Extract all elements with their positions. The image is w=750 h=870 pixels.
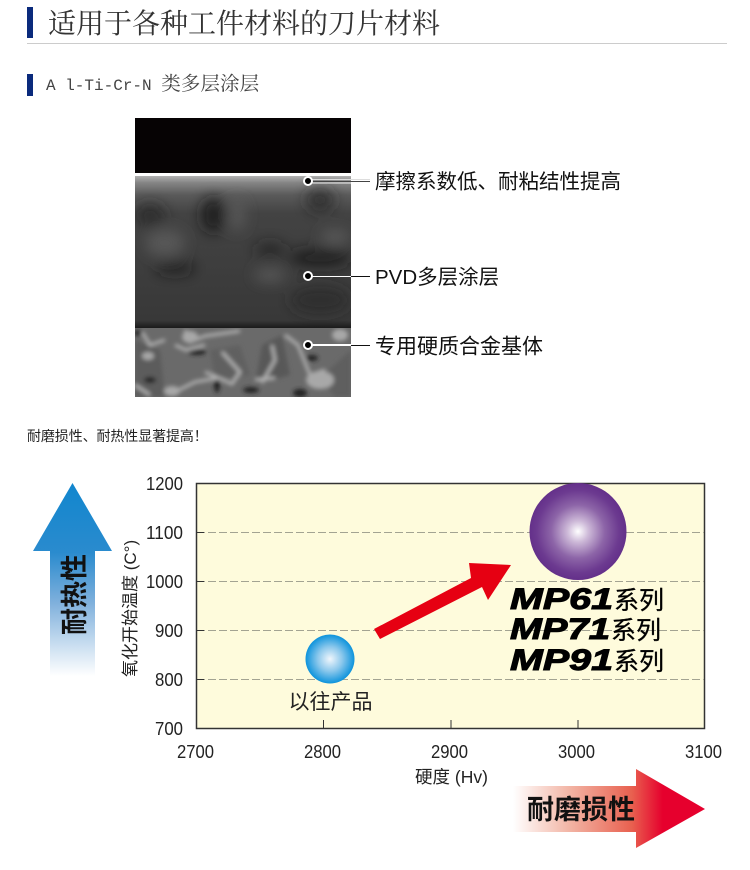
plot area <box>196 484 704 728</box>
title accent bar <box>27 7 33 38</box>
MP series bubble <box>530 483 626 580</box>
coating micrograph with callouts <box>135 118 621 397</box>
x axis tick labels: 2900 <box>431 742 468 762</box>
callout: dedicated carbide substrate: 专用硬质合金基体 <box>375 336 543 358</box>
MP series labels: MP71 <box>510 613 610 646</box>
y axis tick labels: 700 <box>155 719 183 739</box>
MP series labels: MP91 <box>510 644 613 677</box>
x axis tick labels: 2700 <box>177 742 214 762</box>
chart <box>33 474 722 848</box>
subheading <box>27 74 259 96</box>
wear resistance arrow: 耐磨损性 <box>527 795 635 825</box>
y axis tick labels: 1000 <box>146 572 183 592</box>
subheading text: A l-Ti-Cr-N 类多层涂层 <box>46 74 259 95</box>
y axis tick labels: 800 <box>155 670 183 690</box>
y axis tick labels: 1100 <box>146 523 183 543</box>
heat resistance arrow: 耐热性 <box>60 554 90 635</box>
subheading accent bar <box>27 74 33 96</box>
y axis tick labels <box>146 474 183 739</box>
MP series labels <box>510 583 664 677</box>
x axis tick labels: 3100 <box>685 742 722 762</box>
x axis tick labels: 2800 <box>304 742 341 762</box>
y axis tick labels: 1200 <box>146 474 183 494</box>
x axis title: 硬度 (Hv) <box>415 767 488 787</box>
wear resistance arrow <box>513 769 705 848</box>
intro sentence: 耐磨损性、耐热性显著提高！ <box>27 428 208 444</box>
MP series labels: 系列 <box>614 587 664 615</box>
heat resistance arrow <box>33 483 112 676</box>
callout: PVD multilayer coating: PVD多层涂层 <box>375 266 499 289</box>
title <box>27 7 727 44</box>
title text: 适用于各种工件材料的刀片材料 <box>48 9 440 40</box>
y axis tick labels: 900 <box>155 621 183 641</box>
conventional product bubble <box>288 634 372 714</box>
MP series labels: 系列 <box>614 648 664 676</box>
MP series labels: 系列 <box>611 617 661 645</box>
conventional product bubble: 以往产品 <box>288 691 372 714</box>
x axis tick labels <box>177 742 722 762</box>
x axis tick labels: 3000 <box>558 742 595 762</box>
MP series labels: MP61 <box>510 583 613 616</box>
callout: PVD multilayer coating <box>304 266 499 289</box>
y axis title: 氧化开始温度 (C°) <box>121 540 140 677</box>
improvement arrow <box>374 563 511 639</box>
micrograph image <box>134 118 352 397</box>
callout: low friction surface: 摩擦系数低、耐粘结性提高 <box>375 170 621 194</box>
